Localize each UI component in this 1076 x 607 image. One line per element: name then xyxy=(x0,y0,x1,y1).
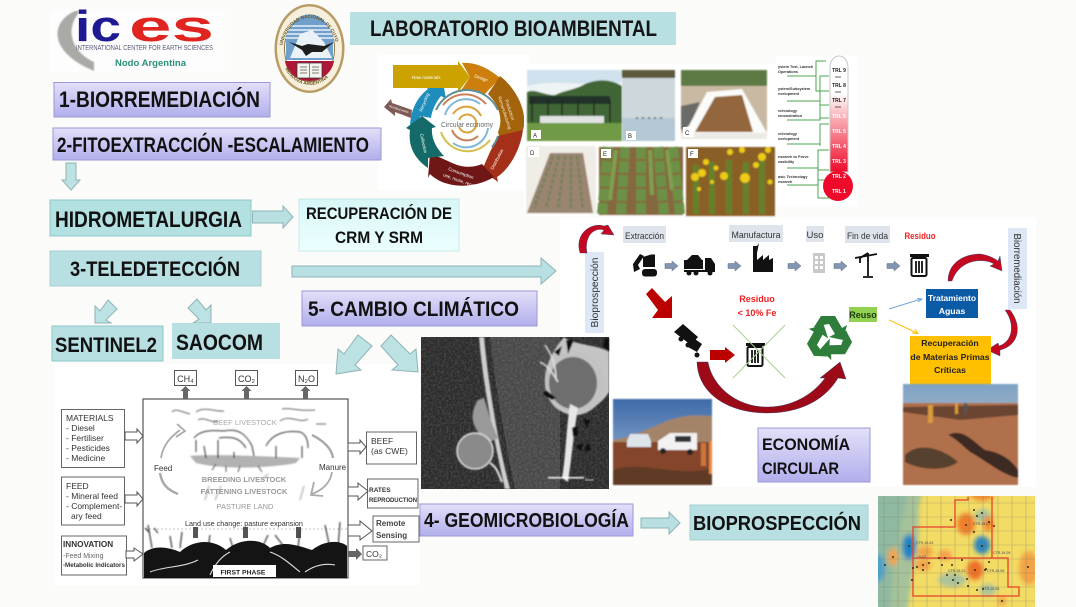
input: innovation: INNOVATION xyxy=(63,540,113,549)
label box: Sentinel2 xyxy=(52,326,163,361)
label box: Recuperación de CRM y SRM: CRM Y SRM xyxy=(335,228,423,247)
output: remote sensing xyxy=(348,516,419,542)
input: feed: - Complement- xyxy=(66,501,122,511)
box: Tratamiento Aguas: Aguas xyxy=(939,306,965,316)
segment: raw materials arrow xyxy=(393,61,470,92)
chart: TRL thermometer xyxy=(776,56,858,206)
segment: distribution xyxy=(482,130,523,182)
icon: factory xyxy=(753,243,773,272)
photo A xyxy=(527,70,622,141)
illustration: clouds xyxy=(172,409,326,424)
side label: Bioprospección: Bioprospección xyxy=(589,257,601,328)
well labels: CTR-19-05 xyxy=(982,587,999,591)
input: materials xyxy=(62,410,143,468)
TRL stage descriptions: esearch to Prove xyxy=(778,155,809,159)
output: beef xyxy=(348,432,416,464)
logo: ICES Nodo Argentina: Nodo Argentina xyxy=(115,58,187,68)
label box: 4- Geomicrobiología: 4- GEOMICROBIOLOGÍA xyxy=(424,509,629,532)
segment: production: Production xyxy=(504,99,516,121)
label box: Bioprospección: BIOPROSPECCIÓN xyxy=(693,511,861,535)
illustration: forest xyxy=(144,522,347,578)
arrow: to Sentinel2 xyxy=(95,300,117,323)
well labels: CTR-19-07 xyxy=(973,522,990,526)
photo C xyxy=(681,70,767,139)
cycle arrow: feed lower xyxy=(160,473,178,494)
arrow: to Saocom xyxy=(188,299,211,323)
TRL stage descriptions: emonstration xyxy=(778,114,803,118)
input: materials: - Medicine xyxy=(66,453,105,463)
chart: concentric rings xyxy=(436,90,498,151)
labels: livestock phases xyxy=(201,475,288,511)
TRL labels: TRL 8 xyxy=(832,83,846,89)
well labels: 19-02 xyxy=(917,555,926,559)
segment: collection xyxy=(406,116,444,168)
map grid xyxy=(878,496,1035,607)
label: Reuso xyxy=(849,307,877,322)
stage: Uso xyxy=(806,226,824,242)
sample points xyxy=(884,509,1029,602)
scale label: 50um xyxy=(585,478,594,482)
central system box xyxy=(143,399,348,578)
arrow: large crescent to recycling xyxy=(697,362,846,413)
label box: 4- Geomicrobiología xyxy=(420,504,633,536)
input: feed: - Mineral feed xyxy=(66,491,118,501)
TRL labels: TRL 2 xyxy=(832,174,846,180)
illustration: cattle xyxy=(190,430,308,500)
photo grid: phytoextraction plots A-F xyxy=(524,64,777,216)
arrow: to bioprospección xyxy=(641,512,680,534)
label box: Saocom xyxy=(172,323,280,359)
input: feed: ary feed xyxy=(71,511,102,521)
label box: 1-Biorremediación xyxy=(54,82,270,117)
arrow: red diagonal xyxy=(646,288,672,318)
input: materials: - Pesticides xyxy=(66,443,110,453)
arrow: to recuperación xyxy=(252,206,293,228)
label: land use change: Land use change: pasture expansion xyxy=(185,519,303,528)
box: Tratamiento Aguas xyxy=(926,289,978,318)
segment: production: Remanufacturing xyxy=(497,96,513,130)
segment: design xyxy=(460,63,500,95)
input: innovation: -Feed Mixing xyxy=(63,553,104,560)
input: feed xyxy=(62,477,143,525)
well labels: CTR-19-06 xyxy=(987,569,1004,573)
stage: Fin de vida xyxy=(845,226,890,243)
arrow: red to bin xyxy=(710,347,735,363)
label: Circular economy: Circular economy xyxy=(441,122,493,129)
label box: Recuperación de CRM y SRM: RECUPERACIÓN DE xyxy=(306,204,452,223)
labels: livestock phases: FATTENING LIVESTOCK xyxy=(201,487,288,496)
label: beef livestock: BEEF LIVESTOCK xyxy=(213,418,277,427)
side label: Biorremediación: Biorremediación xyxy=(1011,234,1023,304)
stage: Manufactura xyxy=(729,225,783,242)
stage: Residuo: Residuo xyxy=(904,231,936,242)
map boundary xyxy=(913,497,1019,596)
photo A: A xyxy=(533,134,537,140)
output: remote sensing: Remote xyxy=(376,519,406,528)
input: innovation xyxy=(62,536,143,575)
emission: CO2: CO₂ xyxy=(238,374,256,384)
well labels xyxy=(916,522,1010,591)
icon: excavator xyxy=(633,254,657,276)
well labels: CTR-19-03 xyxy=(916,541,933,545)
label: residuo less than 10 percent Fe xyxy=(738,294,776,318)
curved arrow: tratamiento to biorremediación xyxy=(948,254,1002,281)
TRL labels xyxy=(832,68,846,195)
segment: production xyxy=(488,76,524,140)
icon: recycling symbol xyxy=(801,316,856,365)
segment: distribution: Distribution xyxy=(489,148,505,170)
input: innovation: -Metabolic Indicators xyxy=(63,562,125,569)
input: materials: - Fertiliser xyxy=(66,433,104,443)
photo B: B xyxy=(628,134,632,140)
label: Reuso: Reuso xyxy=(849,310,877,320)
output: CO2 xyxy=(348,546,387,560)
TRL stage descriptions: ystem Test, Launch xyxy=(778,65,814,69)
box: Recuperación de materias primas críticas: de Materias Primas xyxy=(910,352,990,362)
segment: recycling: Recycling xyxy=(418,92,430,112)
TRL stage descriptions: esearch xyxy=(778,180,793,184)
curved arrow: biorremediación to recuperación xyxy=(987,310,1017,356)
photo B xyxy=(622,70,675,141)
title: Laboratorio Bioambiental: LABORATORIO BIOAMBIENTAL xyxy=(370,16,657,41)
label: residuo less than 10 percent Fe: < 10% Fe xyxy=(738,308,776,318)
cycle arrow: manure lower xyxy=(311,472,332,496)
TRL stage descriptions xyxy=(778,65,814,184)
label: residuo less than 10 percent Fe: Residuo xyxy=(739,294,775,304)
logo: ICES Nodo Argentina: INTERNATIONAL CENTER FOR EARTH SCIENCES xyxy=(76,45,213,52)
thermometer bulb xyxy=(823,171,853,201)
segment: consumption: use, reuse, repair xyxy=(443,172,478,189)
panel: circular economy process xyxy=(560,218,1036,487)
label: first phase: FIRST PHASE xyxy=(221,570,266,576)
arrow: yellow to recuperación xyxy=(889,320,918,334)
output: remote sensing: Sensing xyxy=(376,531,407,540)
TRL labels: TRL 7 xyxy=(832,98,846,104)
label: first phase xyxy=(213,565,276,577)
photo D xyxy=(526,146,596,214)
thermometer tube xyxy=(830,56,848,172)
output: rates reproduction xyxy=(348,479,418,508)
icon: tilted dump truck xyxy=(674,324,702,358)
TRL stage descriptions: ystem/Subsystem xyxy=(778,87,811,91)
output: beef: BEEF xyxy=(371,436,393,446)
TRL labels: TRL 9 xyxy=(832,68,846,74)
arrow: long arrow to circular economy xyxy=(292,258,556,284)
map: bioprospection anomalies xyxy=(878,496,1035,607)
cycle arrow: feed upper xyxy=(161,424,185,458)
arrow: blue to tratamiento xyxy=(889,298,922,309)
TRL stage descriptions: easibility xyxy=(778,160,795,164)
segment: residual waste xyxy=(384,99,412,118)
side label: Biorremediación xyxy=(1008,228,1027,309)
TRL labels: TRL 1 xyxy=(832,189,846,195)
small process arrows xyxy=(665,261,900,271)
TRL labels: TRL 5 xyxy=(832,129,846,135)
photo E xyxy=(599,147,683,215)
emission: N2O xyxy=(296,370,318,399)
emission: CH4 xyxy=(174,370,196,399)
TRL stage descriptions: echnology xyxy=(778,109,798,113)
label box: 1-Biorremediación: 1-BIORREMEDIACIÓN xyxy=(59,87,260,112)
logo: ICES Nodo Argentina: es xyxy=(129,2,214,51)
map colour blobs xyxy=(878,496,1035,607)
icon: dump truck xyxy=(684,255,715,276)
input: feed: FEED xyxy=(66,481,89,491)
labels: livestock phases: PASTURE LAND xyxy=(217,502,274,511)
box: Economía Circular: ECONOMÍA xyxy=(762,435,850,454)
tick marks xyxy=(835,77,841,107)
TRL stage descriptions: asic Technology xyxy=(778,175,808,179)
box: Recuperación de materias primas críticas: Críticas xyxy=(934,365,966,375)
segment: raw materials arrow: Raw materials xyxy=(412,75,441,80)
TRL labels: TRL 6 xyxy=(832,114,846,120)
segment: consumption xyxy=(428,153,494,189)
stage: Uso: Uso xyxy=(807,230,823,241)
TRL labels: TRL 3 xyxy=(832,159,846,165)
box: Economía Circular xyxy=(758,428,870,482)
icon: crane xyxy=(855,253,877,277)
emission: N2O: N₂O xyxy=(298,374,315,384)
photo F xyxy=(686,147,775,216)
label box: Saocom: SAOCOM xyxy=(176,330,263,355)
box: Economía Circular: CIRCULAR xyxy=(762,459,839,478)
TRL stage descriptions: echnology xyxy=(778,132,798,136)
diagram: circular economy wheel xyxy=(378,55,530,190)
logo: ICES Nodo Argentina: ic xyxy=(75,2,121,51)
input: materials: MATERIALS xyxy=(66,413,114,423)
label box: 3-Teledetección: 3-TELEDETECCIÓN xyxy=(70,257,240,281)
arrow: down to hidrometalurgia xyxy=(62,163,80,190)
photo: excavation site xyxy=(903,384,1018,485)
cycle arrow: manure upper xyxy=(312,435,333,458)
label box: Recuperación de CRM y SRM xyxy=(299,199,459,251)
label box: Hidrometalurgia xyxy=(50,200,251,236)
icon: waste bin crossed out xyxy=(733,325,785,378)
title: Laboratorio Bioambiental xyxy=(350,12,676,45)
TRL labels: TRL 4 xyxy=(832,144,846,150)
icon: waste bin xyxy=(910,254,929,276)
label box: 2-Fitoextracción: 2-FITOEXTRACCIÓN -ESCALAMIENTO xyxy=(57,132,369,157)
segment: consumption: Consumption xyxy=(448,166,475,180)
TRL stage descriptions: evelopment xyxy=(778,137,800,141)
segment: recycling xyxy=(410,82,446,128)
box: Recuperación de materias primas críticas: Recuperación xyxy=(921,338,979,348)
side label: Bioprospección xyxy=(585,252,604,333)
labels: livestock phases: BREEDING LIVESTOCK xyxy=(202,475,287,484)
photo C: C xyxy=(685,131,690,137)
segment: residual waste: Residual waste xyxy=(389,104,410,114)
box: Recuperación de materias primas críticas xyxy=(910,336,991,385)
output: CO2: CO₂ xyxy=(366,549,382,559)
label box: 3-Teledetección xyxy=(50,251,261,286)
photo: vehicles at mine site xyxy=(613,399,712,485)
image: SEM micrograph xyxy=(421,337,609,489)
label box: Bioprospección xyxy=(690,505,868,540)
logo: Universidad Nacional de Cuyo seal: UNIVERSIDAD NACIONAL DE CUYO xyxy=(279,14,338,45)
output: beef: (as CWE) xyxy=(371,446,408,456)
label box: 2-Fitoextracción xyxy=(53,128,381,160)
stage: Extracción: Extracción xyxy=(625,231,664,242)
photo F: F xyxy=(690,152,694,158)
arrow: to SEM image xyxy=(381,335,418,372)
label box: 5- Cambio climático: 5- CAMBIO CLIMÁTICO xyxy=(308,298,519,321)
icon: building xyxy=(813,253,825,273)
stage: Extracción xyxy=(623,226,666,243)
logo: ICES Nodo Argentina xyxy=(50,2,225,72)
label box: 5- Cambio climático xyxy=(302,291,537,326)
label box: Sentinel2: SENTINEL2 xyxy=(55,334,157,357)
photo E: E xyxy=(603,152,607,158)
TRL stage descriptions: Operations xyxy=(778,70,798,74)
stage: Fin de vida: Fin de vida xyxy=(847,231,889,242)
label: manure: Manure xyxy=(319,463,347,472)
logo: Universidad Nacional de Cuyo seal: MENDOZA ARGENTINA xyxy=(285,67,328,85)
output: rates reproduction: REPRODUCTION xyxy=(369,497,417,504)
curved arrow: bioprospección to extracción xyxy=(579,225,614,253)
label box: Hidrometalurgia: HIDROMETALURGIA xyxy=(55,207,242,232)
green brackets xyxy=(787,61,829,198)
logo: Universidad Nacional de Cuyo seal xyxy=(274,4,344,93)
label: feed: Feed xyxy=(154,464,172,473)
input: materials: - Diesel xyxy=(66,423,95,433)
emission: CO2 xyxy=(236,370,258,399)
output: rates reproduction: RATES xyxy=(369,487,391,494)
segment: collection: Collection xyxy=(419,133,428,154)
photo D: D xyxy=(530,151,535,157)
well labels: CTR-19-01 xyxy=(948,569,965,573)
diagram: livestock life cycle xyxy=(55,364,420,585)
stage: Manufactura: Manufactura xyxy=(732,230,781,241)
TRL stage descriptions: evelopment xyxy=(778,92,800,96)
emission: CH4: CH₄ xyxy=(177,374,194,384)
box: Tratamiento Aguas: Tratamiento xyxy=(928,293,976,303)
well labels: CTR-19-09 xyxy=(993,551,1010,555)
arrow: to livestock diagram xyxy=(336,335,372,374)
segment: design: Design xyxy=(474,73,489,83)
